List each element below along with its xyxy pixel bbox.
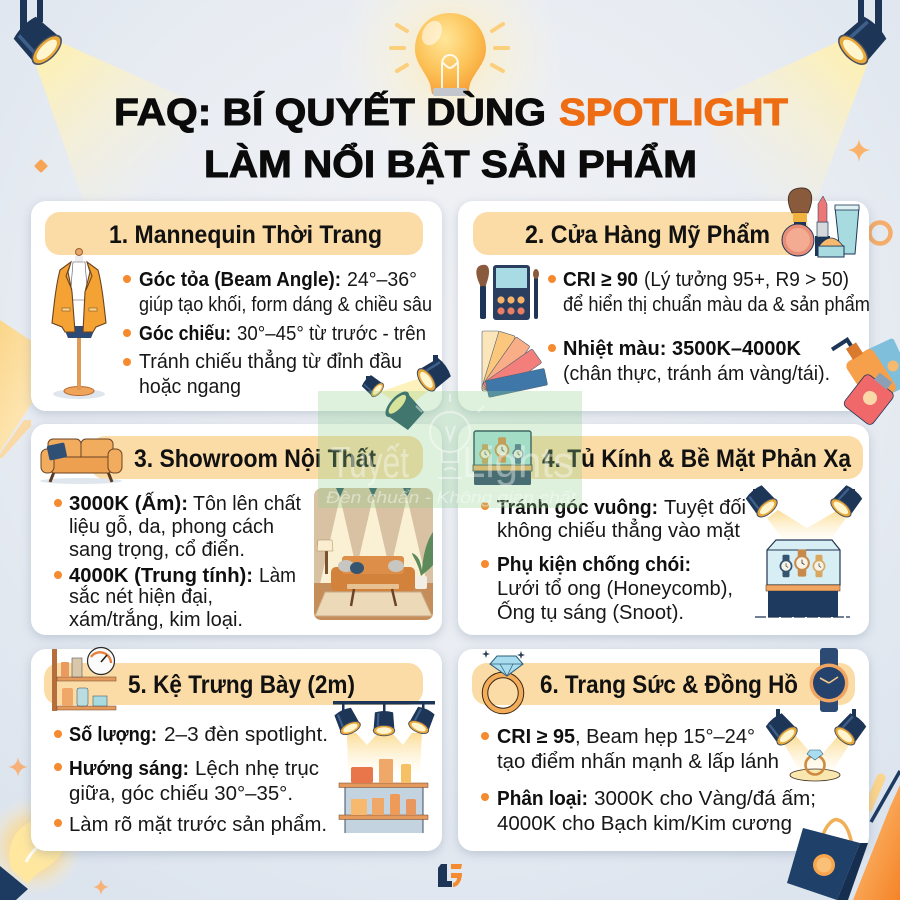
- bullets and text: Lệch nhẹ trục: [195, 758, 319, 780]
- bullets and text: liệu gỗ, da, phong cách: [69, 515, 274, 538]
- bullets and text: CRI ≥ 95: [497, 726, 575, 748]
- icon: mannequin: [52, 248, 106, 399]
- bullets and text: Tuyệt đối: [664, 497, 746, 519]
- decoration: left paper shapes: [0, 320, 60, 458]
- bullets and text: Góc chiếu:: [139, 323, 231, 345]
- light beam: top right: [712, 40, 868, 205]
- bullets and text: CRI ≥ 90: [563, 269, 638, 291]
- bullets and text: 4000K (Trung tính):: [69, 565, 253, 587]
- spotlight lamp: top left: [9, 0, 67, 70]
- icon: track lights over shelf: [332, 701, 437, 772]
- bullets and text: [481, 726, 816, 835]
- bullets and text: Lưới tổ ong (Honeycomb),: [497, 578, 733, 600]
- watermark: Lights: [462, 438, 574, 487]
- bullets and text: 30°–45° từ trước - trên: [237, 323, 426, 345]
- icon: colour swatch fan: [481, 331, 548, 397]
- title: FAQ: BÍ QUYẾT DÙNG: [114, 90, 546, 134]
- heading 1: 1. Mannequin Thời Trang: [109, 221, 382, 249]
- bullets and text: Tránh góc vuông:: [497, 497, 658, 519]
- spotlight lamp: top right: [833, 0, 891, 70]
- heading 2: 2. Cửa Hàng Mỹ Phẩm: [525, 221, 770, 249]
- bullets and text: hoặc ngang: [139, 376, 241, 398]
- panel: 3 Furniture showroom: [31, 424, 442, 635]
- bullets and text: [54, 724, 328, 836]
- bullets and text: xám/trắng, kim loại.: [69, 608, 243, 631]
- icon: glass display case: [755, 540, 850, 617]
- bullets and text: (chân thực, tránh ám vàng/tái).: [563, 363, 830, 385]
- title: SPOTLIGHT: [559, 92, 788, 134]
- bullets and text: 4000K cho Bạch kim/Kim cương: [497, 813, 792, 835]
- icon: makeup palette: [476, 265, 539, 320]
- bullets and text: [123, 269, 432, 398]
- bullets and text: Ống tụ sáng (Snoot).: [497, 600, 684, 624]
- bullets and text: (Lý tưởng 95+, R9 > 50): [644, 269, 849, 291]
- icon: cosmetics set: [782, 188, 859, 257]
- heading 4: 4. Tủ Kính & Bề Mặt Phản Xạ: [542, 445, 852, 473]
- bullets and text: Phân loại:: [497, 788, 588, 810]
- bullets and text: [54, 492, 301, 631]
- bullets and text: 24°–36°: [347, 269, 417, 291]
- bullets and text: sang trọng, cổ điển.: [69, 539, 245, 561]
- icon: spotlights cluster between panels 1 and 2 area: [360, 355, 454, 433]
- watermark: [318, 391, 582, 508]
- bullets and text: giúp tạo khối, form dáng & chiều sâu: [139, 294, 432, 316]
- icon: bottles: [832, 331, 900, 426]
- bullets and text: 2–3 đèn spotlight.: [164, 724, 328, 746]
- heading 1: [45, 212, 423, 255]
- heading 3: 3. Showroom Nội Thất: [134, 445, 377, 473]
- bullets and text: Góc tỏa (Beam Angle):: [139, 269, 341, 291]
- bullets and text: không chiếu thẳng vào mặt: [497, 518, 740, 542]
- image: living room: [314, 488, 433, 620]
- bullets and text: , Beam hẹp 15°–24°: [575, 726, 755, 748]
- light beam: top left: [36, 42, 190, 205]
- decoration: sparkle top right: [847, 139, 871, 162]
- bullets and text: Phụ kiện chống chói:: [497, 554, 691, 576]
- heading 6: 6. Trang Sức & Đồng Hồ: [540, 671, 798, 699]
- panel: 2 Cosmetics: [458, 188, 900, 426]
- bullets and text: 3000K (Ấm):: [69, 492, 188, 515]
- icon: shelf with products: [339, 759, 428, 833]
- bullets and text: sắc nét hiện đại,: [69, 585, 213, 608]
- bullets and text: Số lượng:: [69, 724, 157, 746]
- panel: 1 Mannequin: [31, 201, 442, 411]
- icon: light bulb: [338, 0, 562, 167]
- bullets and text: để hiển thị chuẩn màu da & sản phẩm: [563, 294, 870, 316]
- decoration: diamond: [34, 159, 48, 173]
- heading 2: [473, 212, 808, 255]
- bullets and text: Làm: [259, 565, 296, 587]
- brand logo: [438, 864, 462, 887]
- heading 5: [44, 663, 423, 705]
- panel: 6 Jewelry and watches: [458, 648, 869, 851]
- icon: spotlights on ring: [763, 709, 869, 781]
- bullets and text: Hướng sáng:: [69, 758, 189, 780]
- bullets and text: tạo điểm nhấn mạnh & lấp lánh: [497, 751, 779, 773]
- bullets and text: Làm rõ mặt trước sản phẩm.: [69, 814, 327, 836]
- heading 6: [472, 663, 855, 705]
- heading 4: [520, 436, 863, 479]
- title: [114, 90, 788, 186]
- panel: 4 Glass cabinet: [458, 424, 869, 635]
- watermark: Tuyết: [331, 438, 409, 487]
- decoration: bottom right corner shapes: [853, 771, 900, 900]
- bullets and text: [548, 269, 870, 385]
- icon: wristwatch: [810, 648, 848, 712]
- heading 3: [90, 436, 423, 479]
- icon: shelf and gauge: [52, 648, 116, 711]
- icon: shopping bag: [787, 820, 868, 900]
- bullets and text: Tôn lên chất: [193, 493, 301, 515]
- bullets and text: Tránh chiếu thẳng từ đỉnh đầu: [139, 349, 402, 373]
- icon: sofa: [40, 439, 122, 484]
- icon: watch display cabinet: [473, 431, 532, 485]
- icon: two spotlights over vitrine: [743, 483, 865, 540]
- heading 5: 5. Kệ Trưng Bày (2m): [128, 671, 355, 699]
- title: LÀM NỔI BẬT SẢN PHẨM: [204, 141, 697, 186]
- bullets and text: Nhiệt màu: 3500K–4000K: [563, 338, 802, 360]
- icon: diamond ring: [482, 650, 525, 711]
- bullets and text: [481, 497, 746, 624]
- decoration: sparkles bottom left: [8, 757, 109, 895]
- decoration: glowing bulb bottom left: [0, 796, 84, 900]
- panel: 5 Display shelf: [31, 648, 442, 851]
- bullets and text: 3000K cho Vàng/đá ấm;: [594, 788, 816, 810]
- watermark: Đèn chuẩn - Không gian chất: [326, 488, 577, 507]
- decoration: ring: [870, 222, 890, 244]
- bullets and text: giữa, góc chiếu 30°–35°.: [69, 783, 293, 805]
